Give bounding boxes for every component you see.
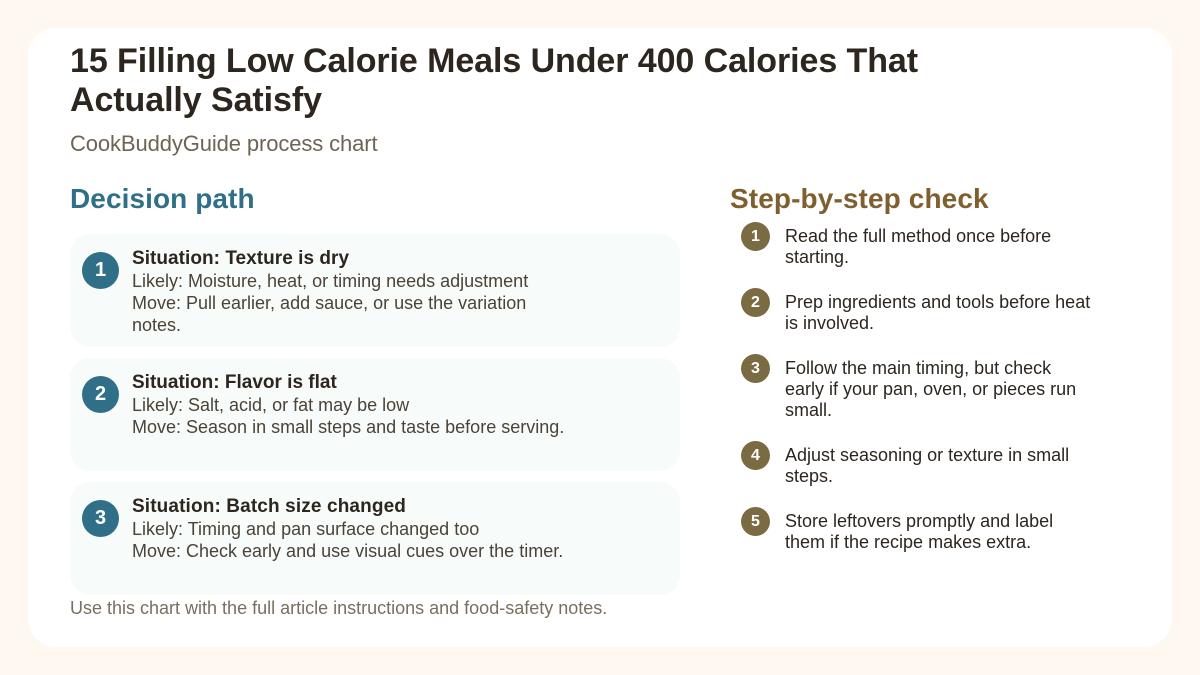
title: 15 Filling Low Calorie Meals Under 400 Calories That — [70, 42, 918, 80]
step badge 2 — [741, 288, 770, 317]
step text 3 — [785, 358, 1076, 420]
text: situation 2: Move: Season in small steps and taste before serving. — [132, 417, 564, 437]
step badge 4 — [741, 441, 770, 470]
step 1 — [741, 222, 1051, 267]
number badge 2: 2 — [95, 383, 106, 405]
step text 3: Follow the main timing, but check — [785, 358, 1051, 378]
step 4 — [741, 441, 1069, 486]
panel: situation 3 — [70, 482, 680, 595]
text: situation 3: Move: Check early and use visual cues over the timer. — [132, 541, 563, 561]
number badge 1 — [82, 252, 119, 289]
step text 1: Read the full method once before — [785, 226, 1051, 246]
step 5 — [741, 507, 1053, 552]
step text 2: Prep ingredients and tools before heat — [785, 292, 1090, 312]
step badge 2: 2 — [751, 294, 760, 311]
text: situation 1: Likely: Moisture, heat, or timing needs adjustment — [132, 271, 528, 291]
number badge 1: 1 — [95, 259, 106, 281]
text: situation 3: Likely: Timing and pan surface changed too — [132, 519, 479, 539]
step text 3: early if your pan, oven, or pieces run — [785, 379, 1076, 399]
title — [70, 42, 918, 119]
panel: situation 1 — [70, 234, 680, 347]
step text 5 — [785, 511, 1053, 552]
step text 1: starting. — [785, 247, 849, 267]
footnote: Use this chart with the full article instructions and food-safety notes. — [70, 598, 607, 618]
step 2 — [741, 288, 1090, 333]
panel: situation 2 — [70, 358, 680, 471]
number badge 2 — [82, 376, 119, 413]
title: Actually Satisfy — [70, 81, 322, 119]
heading: step-by-step check: Step-by-step check — [730, 183, 989, 214]
step badge 5 — [741, 507, 770, 536]
step text 2: is involved. — [785, 313, 874, 333]
step badge 3 — [741, 354, 770, 383]
step text 5: Store leftovers promptly and label — [785, 511, 1053, 531]
step badge 1 — [741, 222, 770, 251]
step 3 — [741, 354, 1076, 420]
step text 4: Adjust seasoning or texture in small — [785, 445, 1069, 465]
text: situation 1: Situation: Texture is dry — [132, 248, 349, 269]
step badge 4: 4 — [751, 447, 760, 464]
step text 3: small. — [785, 400, 832, 420]
text: situation 1: Move: Pull earlier, add sauce, or use the variation — [132, 293, 526, 313]
text: situation 1: notes. — [132, 315, 181, 335]
step text 4: steps. — [785, 466, 833, 486]
subtitle: CookBuddyGuide process chart — [70, 131, 378, 156]
step badge 3: 3 — [751, 360, 760, 377]
step text 4 — [785, 445, 1069, 486]
text: situation 2 — [132, 372, 564, 437]
text: situation 1 — [132, 248, 528, 335]
text: situation 2: Situation: Flavor is flat — [132, 372, 337, 393]
step text 1 — [785, 226, 1051, 267]
number badge 3 — [82, 500, 119, 537]
text: situation 3: Situation: Batch size changed — [132, 496, 406, 517]
step text 2 — [785, 292, 1090, 333]
step text 5: them if the recipe makes extra. — [785, 532, 1031, 552]
number badge 3: 3 — [95, 507, 106, 529]
heading: decision path: Decision path — [70, 183, 255, 214]
step badge 5: 5 — [751, 513, 760, 530]
text: situation 3 — [132, 496, 563, 561]
step badge 1: 1 — [751, 228, 760, 245]
text: situation 2: Likely: Salt, acid, or fat may be low — [132, 395, 409, 415]
